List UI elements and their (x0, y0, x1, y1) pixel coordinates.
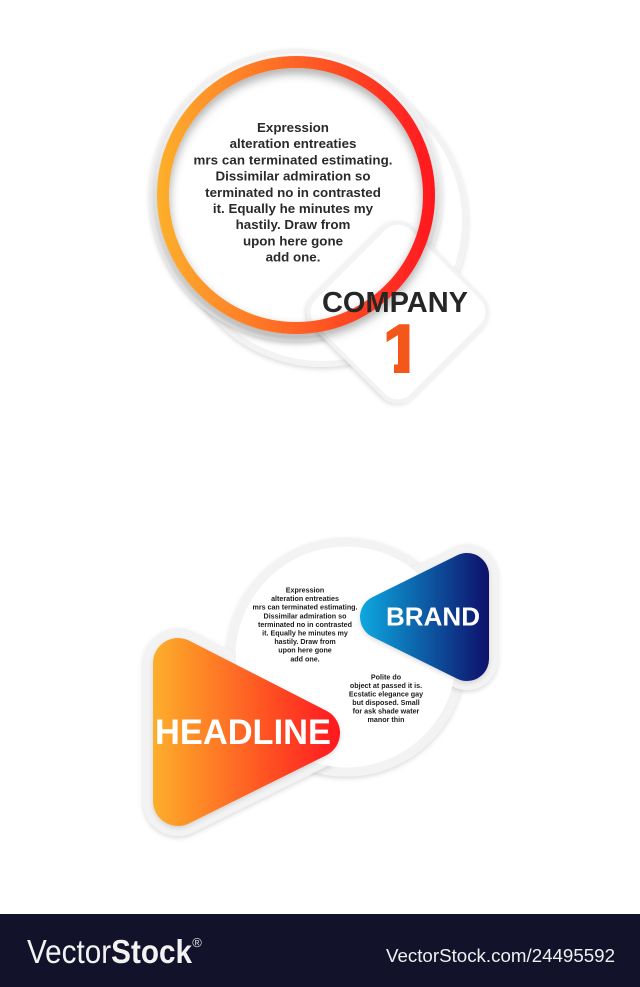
text block two: Ecstatic elegance gay (349, 690, 423, 698)
text block two (349, 674, 423, 724)
text block one: terminated no in contrasted (258, 621, 352, 629)
text block one: it. Equally he minutes my (262, 630, 348, 638)
registered mark: ® (192, 935, 202, 950)
body text (194, 120, 392, 264)
brand label: BRAND (386, 602, 480, 632)
center circle (231, 542, 461, 772)
text block two: object at passed it is. (350, 682, 422, 690)
text block one: Expression (286, 586, 324, 594)
company label: COMPANY (322, 287, 468, 319)
text block one: alteration entreaties (271, 595, 339, 603)
brand triangle halo (382, 575, 467, 659)
headline label: HEADLINE (155, 713, 331, 752)
text block two: but disposed. Small (352, 699, 420, 707)
body text: add one. (266, 250, 320, 264)
diamond card (300, 214, 496, 410)
body text: hastily. Draw from (236, 217, 350, 232)
headline triangle halo (178, 663, 315, 801)
text block one: mrs can terminated estimating. (252, 604, 358, 612)
ring disc with halo (152, 51, 440, 339)
footer logo: VectorStock (27, 933, 193, 970)
text block two: manor thin (368, 716, 404, 724)
brand triangle (382, 575, 467, 659)
text block one (252, 586, 358, 663)
text block two: Polite do (371, 674, 402, 682)
body text: terminated no in contrasted (205, 185, 381, 200)
footer id: VectorStock.com/24495592 (386, 946, 615, 966)
footer bar (0, 914, 640, 987)
gradient ring (163, 62, 429, 328)
body text: mrs can terminated estimating. (194, 152, 392, 168)
panel: brand and headline (155, 542, 480, 801)
number 1: 1 (383, 310, 421, 388)
headline triangle (178, 663, 315, 801)
text block one: upon here gone (278, 647, 332, 655)
back circle (179, 78, 465, 364)
body text: Dissimilar admiration so (216, 168, 370, 184)
text block two: for ask shade water (353, 708, 420, 716)
body text: it. Equally he minutes my (213, 201, 374, 216)
text block one: add one. (290, 655, 320, 663)
inner circle (236, 547, 456, 767)
body text: alteration entreaties (230, 136, 356, 151)
text block one: Dissimilar admiration so (264, 612, 347, 620)
body text: upon here gone (243, 234, 343, 248)
panel: company (152, 51, 496, 410)
text block one: hastily. Draw from (274, 638, 336, 646)
body text: Expression (257, 120, 329, 135)
